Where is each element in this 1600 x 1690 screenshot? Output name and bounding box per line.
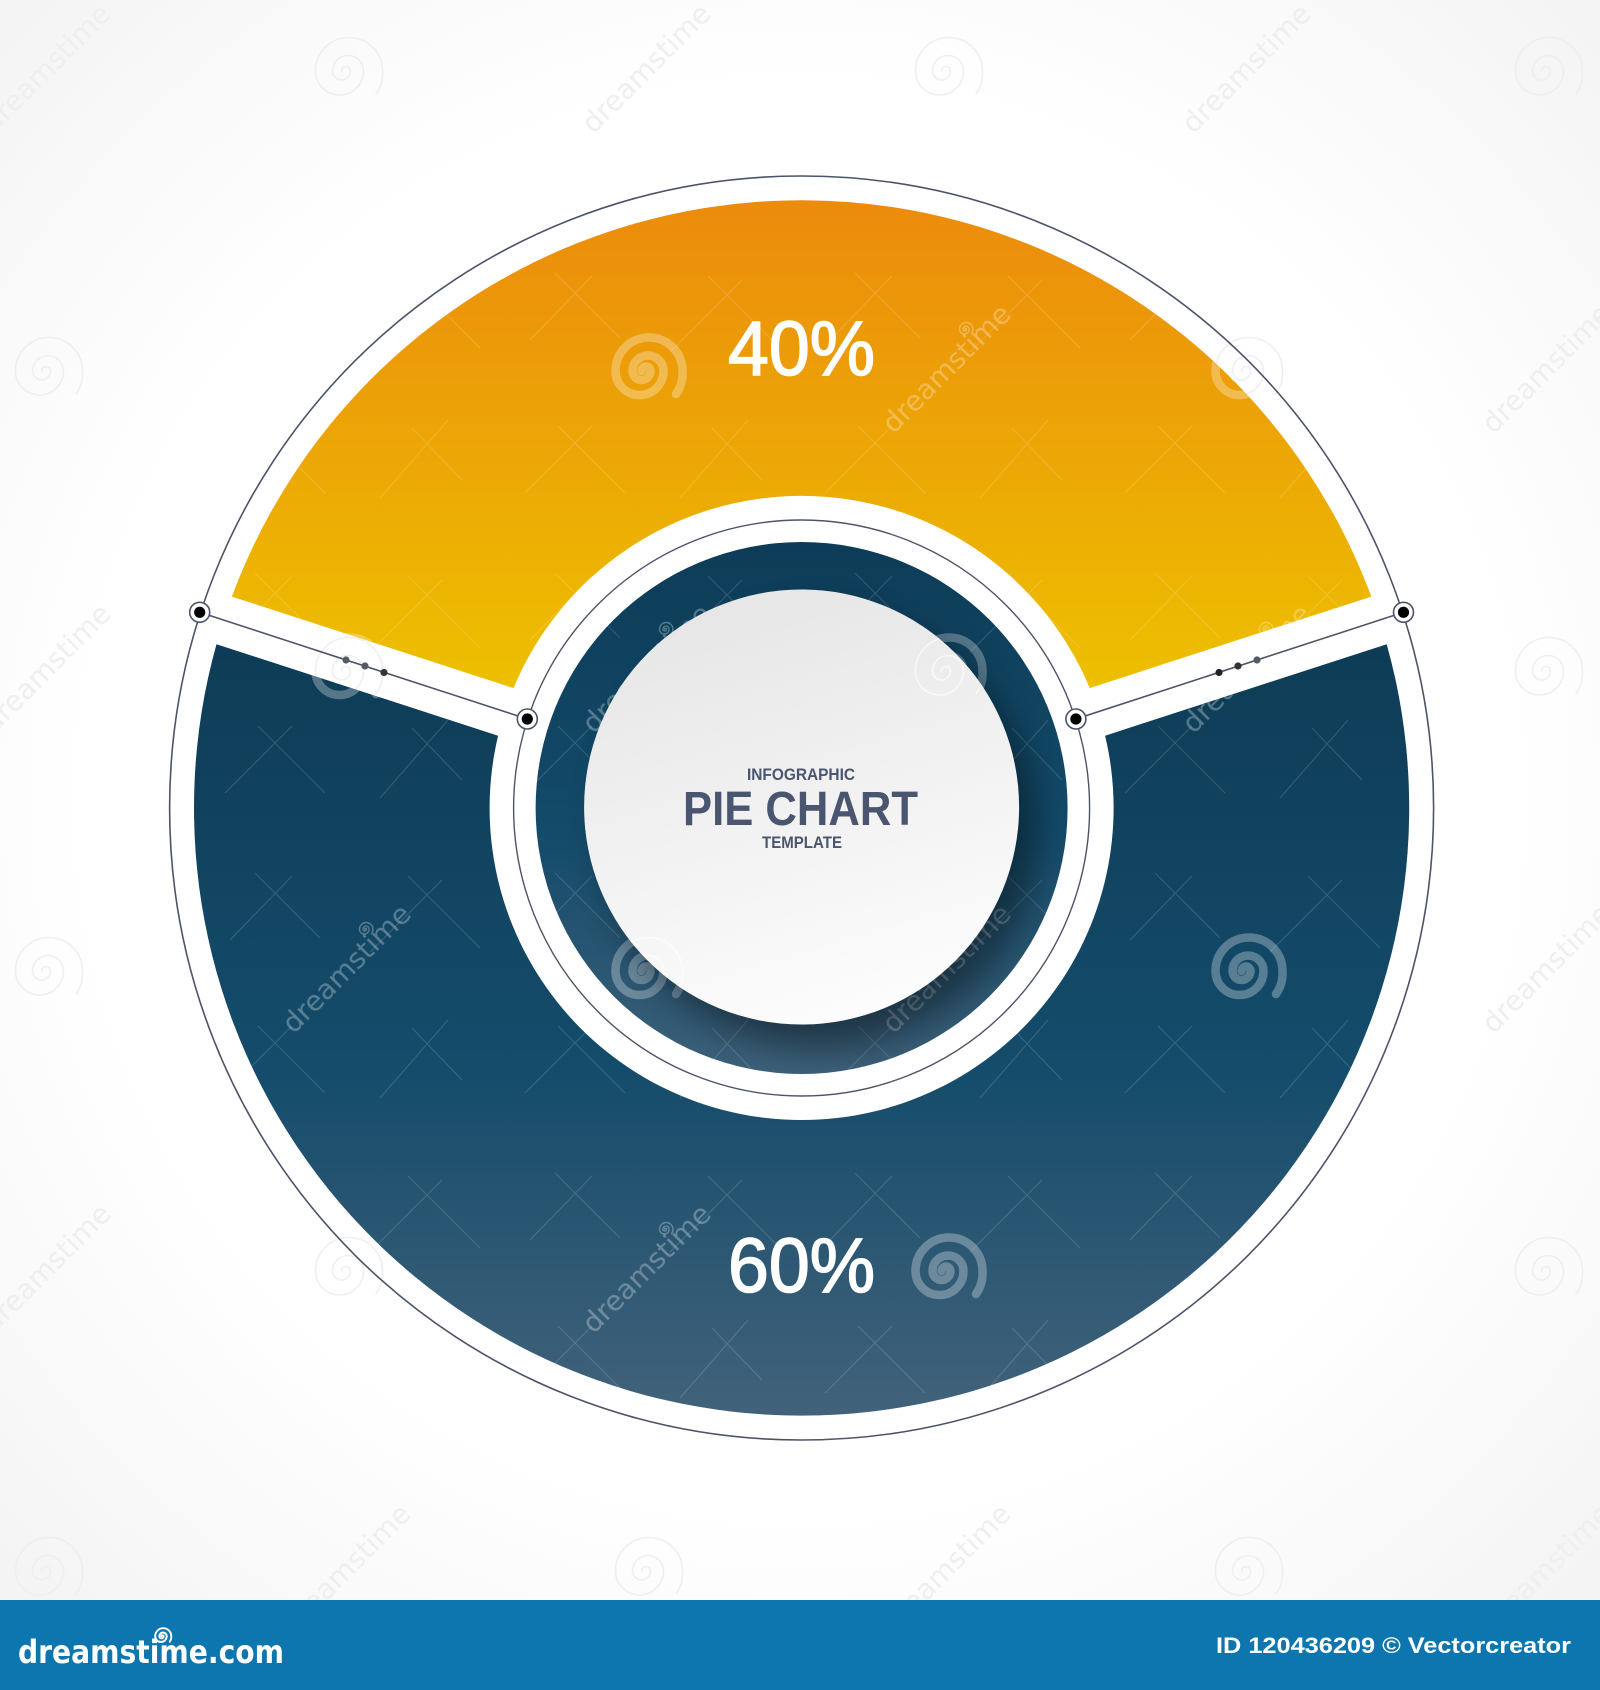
center title: PIE CHART [683, 783, 918, 836]
watermark overlay on coloured fills: dreamstime [1175, 1197, 1317, 1339]
faint watermark layer on background: dreamstime [1175, 0, 1317, 139]
watermark overlay on coloured fills: dreamstime [575, 597, 717, 739]
faint watermark on disc [616, 638, 983, 995]
footer bar [0, 1600, 1600, 1690]
center disc shadow [602, 612, 1038, 1048]
watermark overlay on coloured fills: dreamstime [875, 297, 1017, 439]
center title: INFOGRAPHIC [747, 766, 855, 784]
watermark overlay on coloured fills: dreamstime [275, 297, 417, 439]
faint watermark layer on background: dreamstime [575, 0, 717, 139]
center title: TEMPLATE [762, 834, 842, 852]
pie segment: 40% orange [232, 200, 1371, 688]
watermark overlay on coloured fills [224, 272, 1380, 1398]
watermark overlay on coloured fills: dreamstime [575, 1197, 717, 1339]
center title [683, 766, 918, 852]
center disc [584, 590, 1019, 1024]
watermark overlay on coloured fills: dreamstime [275, 897, 417, 1039]
left divider connector [190, 602, 537, 729]
footer bar: ID 120436209 © Vectorcreator [1216, 1633, 1572, 1658]
inner circle outline [514, 520, 1090, 1096]
footer bar: dreamstime.com [18, 1633, 284, 1671]
label: 60%: 60% [728, 1223, 875, 1309]
label: 40%: 40% [728, 306, 875, 392]
watermark overlay on coloured fills: dreamstime [1175, 597, 1317, 739]
faint watermark layer on background: dreamstime [275, 1497, 417, 1639]
pie segment: 60% dark blue [194, 644, 1409, 1416]
watermark overlay on coloured fills: dreamstime [875, 897, 1017, 1039]
faint watermark layer on background: dreamstime [875, 1497, 1017, 1639]
inner blue ring [536, 542, 1068, 1074]
outer circle outline [170, 176, 1434, 1440]
right divider connector [1066, 602, 1414, 729]
